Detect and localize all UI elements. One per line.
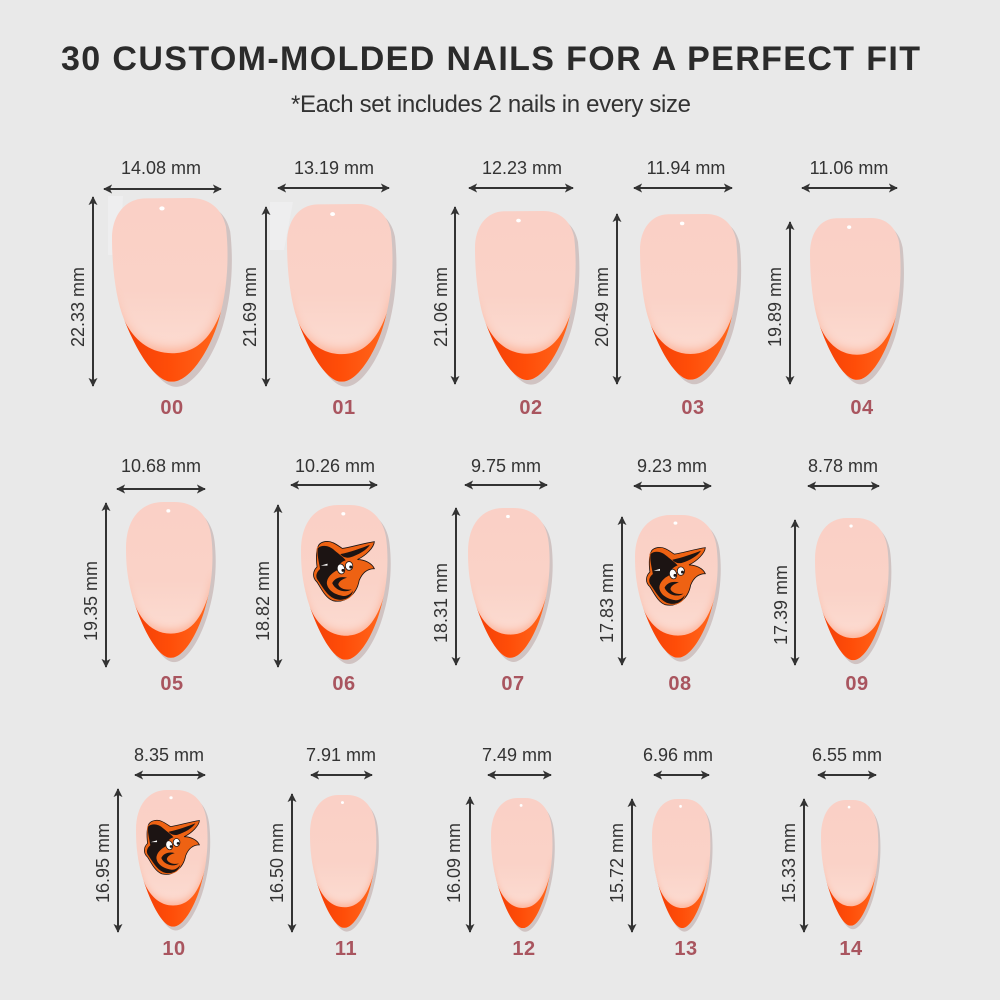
height arrow 12 [469,797,471,932]
height label 07: 18.31 mm [431,563,451,643]
width label 01: 13.19 mm [294,158,374,178]
nail 09 [814,518,891,664]
size 03 [592,158,741,419]
height arrow 11 [291,794,293,932]
width label 13: 6.96 mm [643,745,713,765]
size 07 [431,456,553,695]
height arrow 06 [277,505,279,667]
size 14 [779,745,882,960]
team logo on nail 08 [646,547,705,605]
size 00 [68,158,232,419]
number 09: 09 [845,673,869,695]
size 13 [607,745,713,960]
width arrow 08 [634,485,711,487]
height label 11: 16.50 mm [267,823,287,903]
number 12: 12 [512,938,536,960]
width arrow 06 [291,484,377,486]
height label 05: 19.35 mm [81,561,101,641]
nail 05 [125,502,216,662]
width label 07: 9.75 mm [471,456,541,476]
subtitle: *Each set includes 2 nails in every size [291,91,691,118]
team logo on nail 10 [144,820,199,874]
nail 03 [639,214,741,384]
number 07: 07 [501,673,525,695]
width arrow 10 [135,774,205,776]
height label 14: 15.33 mm [779,823,799,903]
number 06: 06 [332,673,356,695]
size 05 [81,456,216,695]
title: 30 CUSTOM-MOLDED NAILS FOR A PERFECT FIT [61,40,920,78]
number 02: 02 [519,397,543,419]
number 08: 08 [668,673,692,695]
width arrow 07 [465,484,547,486]
nail 06 [300,505,391,664]
nail 13 [651,799,713,932]
width arrow 14 [818,774,876,776]
size 08 [597,456,721,695]
height label 12: 16.09 mm [444,823,464,903]
height label 09: 17.39 mm [771,565,791,645]
height label 06: 18.82 mm [253,561,273,641]
height arrow 05 [105,503,107,667]
number 14: 14 [839,938,863,960]
width arrow 01 [278,187,389,189]
width label 11: 7.91 mm [306,745,376,765]
width label 06: 10.26 mm [295,456,375,476]
nail 00 [110,198,232,387]
height arrow 08 [621,517,623,665]
nail 07 [467,508,553,662]
width label 04: 11.06 mm [810,158,888,178]
size 04 [765,158,904,419]
width label 00: 14.08 mm [121,158,201,178]
nail 11 [309,795,379,932]
width arrow 13 [654,774,709,776]
height label 02: 21.06 mm [431,267,451,347]
nail 08 [634,515,721,662]
height arrow 00 [92,197,94,386]
number 13: 13 [674,938,698,960]
number 01: 01 [332,397,356,419]
width arrow 00 [104,188,221,190]
height arrow 07 [455,508,457,665]
width arrow 12 [488,774,551,776]
height label 13: 15.72 mm [607,823,627,903]
height arrow 04 [789,222,791,384]
number 05: 05 [160,673,184,695]
height arrow 14 [803,799,805,932]
width label 02: 12.23 mm [482,158,562,178]
size 12 [444,745,555,960]
width label 05: 10.68 mm [121,456,201,476]
width arrow 11 [311,774,372,776]
height label 00: 22.33 mm [68,267,88,347]
height arrow 09 [794,520,796,665]
height arrow 02 [454,207,456,384]
number 10: 10 [162,938,186,960]
nail 01 [285,204,396,387]
height arrow 03 [616,214,618,384]
glare behind nails 00 and 01 [108,196,293,255]
height label 04: 19.89 mm [765,267,785,347]
width arrow 03 [634,187,732,189]
width arrow 04 [802,187,897,189]
width arrow 09 [808,485,879,487]
size 11 [267,745,379,960]
nail 04 [809,218,904,384]
team logo on nail 06 [314,541,374,601]
height label 08: 17.83 mm [597,563,617,643]
height arrow 13 [631,799,633,932]
height arrow 10 [117,789,119,932]
height label 10: 16.95 mm [93,823,113,903]
size 01 [240,158,396,419]
width arrow 02 [469,187,573,189]
size 10 [93,745,210,960]
width label 08: 9.23 mm [637,456,707,476]
size 02 [431,158,579,419]
size 09 [771,456,891,695]
width arrow 05 [117,488,205,490]
width label 10: 8.35 mm [134,745,204,765]
height label 03: 20.49 mm [592,267,612,347]
height label 01: 21.69 mm [240,267,260,347]
size 06 [253,456,391,695]
nail 10 [135,790,210,930]
width label 03: 11.94 mm [647,158,725,178]
number 04: 04 [850,397,874,419]
height arrow 01 [265,207,267,386]
width label 12: 7.49 mm [482,745,552,765]
number 03: 03 [681,397,705,419]
nail 14 [820,800,880,929]
width label 14: 6.55 mm [812,745,882,765]
number 00: 00 [160,397,184,419]
nail 12 [490,798,555,932]
nail 02 [474,211,579,385]
number 11: 11 [335,938,357,960]
width label 09: 8.78 mm [808,456,878,476]
